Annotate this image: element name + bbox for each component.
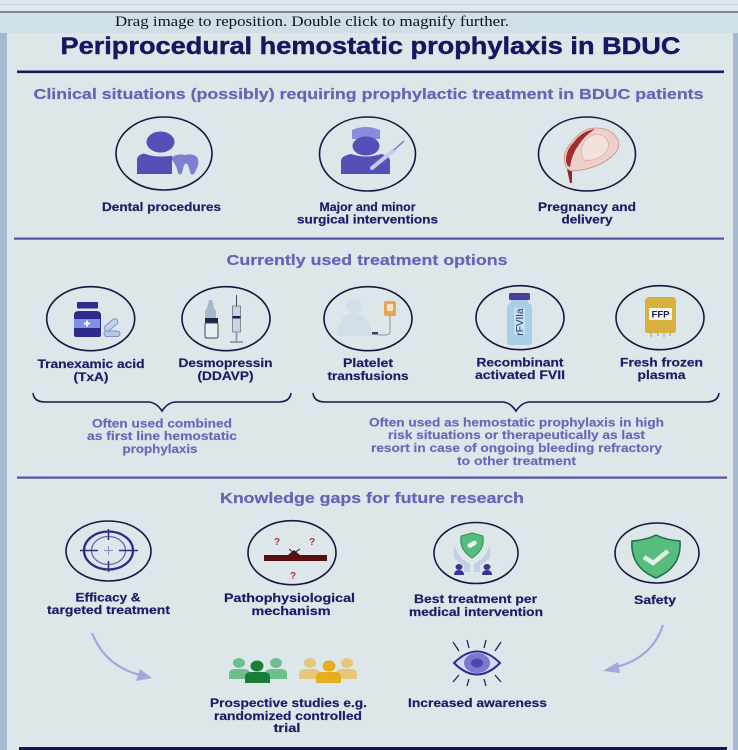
icon: hands holding shield [454, 533, 492, 575]
item: dental procedures [102, 117, 221, 214]
item: best treatment: medical intervention [409, 605, 543, 619]
item: recombinant FVII: Recombinant [476, 356, 564, 370]
item: pathophysiological mechanism: Pathophysiological [224, 591, 355, 605]
item: pathophysiological mechanism: mechanism [252, 604, 330, 618]
arrow: efficacy to studies [92, 633, 152, 681]
icon: syringe [230, 295, 243, 342]
icon: target [80, 529, 138, 572]
icon: surgeon with scalpel [341, 127, 404, 174]
panel: treatment options [33, 252, 719, 468]
item: efficacy: Efficacy & [76, 591, 141, 605]
icon: uterus with fetus [564, 128, 619, 183]
item: platelet transfusions [324, 287, 412, 383]
icon: damaged vessel with question marks: ? [274, 537, 280, 548]
item: tranexamic acid: Tranexamic acid [38, 357, 144, 371]
icon: damaged vessel with question marks: ? [290, 571, 296, 582]
item: pregnancy and delivery: delivery [562, 212, 613, 226]
item: desmopressin: (DDAVP) [198, 369, 254, 383]
icon: yellow people group [299, 658, 357, 683]
heading: clinical situations: Clinical situations (possibly) requiring prophylactic treatment in BDUC patients [34, 86, 704, 103]
panel: knowledge gaps [47, 490, 699, 735]
arrow: safety to awareness [603, 625, 663, 673]
panel: clinical situations [34, 86, 704, 226]
item: efficacy: targeted treatment [47, 603, 170, 617]
item: pregnancy and delivery [538, 117, 636, 226]
item: platelet transfusions: Platelet [343, 356, 393, 370]
icon: damaged vessel with question marks [264, 537, 327, 582]
item: pregnancy and delivery: Pregnancy and [538, 200, 636, 214]
icon: rFVIIa vial: rFVIIa [515, 308, 526, 336]
note: high risk situations: resort in case of ongoing bleeding refractory [371, 443, 663, 455]
item: safety [615, 523, 699, 607]
item: increased awareness: Increased awareness [408, 696, 547, 710]
item: pathophysiological mechanism [224, 521, 355, 618]
note: first line prophylaxis: prophylaxis [122, 444, 198, 456]
item: increased awareness [408, 640, 547, 710]
item: surgical interventions: surgical interventions [297, 212, 438, 226]
item: prospective studies: trial [274, 721, 300, 735]
item: prospective studies: Prospective studies e.g. [210, 696, 367, 710]
icon: damaged vessel with question marks: ? [309, 537, 315, 548]
item: fresh frozen plasma [616, 286, 704, 382]
item: recombinant FVII [475, 286, 565, 382]
item: prospective studies: randomized controlled [214, 709, 362, 723]
item: fresh frozen plasma: plasma [638, 368, 686, 382]
icon: FFP bag: FFP [652, 310, 670, 320]
item: efficacy [47, 521, 170, 617]
item: desmopressin: Desmopressin [178, 356, 272, 370]
note: high risk situations: to other treatment [457, 456, 576, 468]
heading: treatment options: Currently used treatment options [226, 252, 508, 269]
icon: shield with check [632, 535, 680, 578]
note: high risk situations: risk situations or therapeutically as last [388, 430, 645, 442]
item: platelet transfusions: transfusions [328, 369, 409, 383]
item: safety: Safety [634, 593, 676, 607]
note: first line prophylaxis: Often used combined [92, 419, 232, 431]
icon: spray bottle [205, 300, 218, 338]
heading: knowledge gaps: Knowledge gaps for future research [220, 490, 524, 507]
item: best treatment [409, 522, 543, 619]
item: fresh frozen plasma: Fresh frozen [620, 356, 703, 370]
item: recombinant FVII: activated FVII [475, 368, 565, 382]
item: dental procedures: Dental procedures [102, 200, 221, 214]
item: best treatment: Best treatment per [414, 592, 537, 606]
brace: high risk group [313, 393, 719, 411]
brace: first line group [33, 393, 291, 411]
item: tranexamic acid: (TxA) [74, 370, 108, 384]
note: first line prophylaxis: as first line hemostatic [87, 431, 238, 443]
note: high risk situations [369, 418, 664, 468]
icon: person with tooth [137, 132, 198, 175]
item: tranexamic acid [38, 287, 144, 384]
icon: eye [453, 640, 501, 686]
item: prospective studies [210, 658, 367, 735]
icon: green people group [229, 658, 287, 683]
viewer hint text: Drag image to reposition. Double click to magnify further. [115, 14, 509, 30]
item: desmopressin [178, 287, 272, 383]
title: Periprocedural hemostatic prophylaxis in BDUC [60, 33, 680, 60]
item: surgical interventions: Major and minor [320, 200, 416, 214]
note: high risk situations: Often used as hemostatic prophylaxis in high [369, 418, 664, 430]
icon: patient with platelet bag [336, 299, 396, 336]
item: surgical interventions [297, 117, 438, 226]
icon: pill bottle [74, 302, 120, 337]
note: first line prophylaxis [87, 419, 238, 456]
